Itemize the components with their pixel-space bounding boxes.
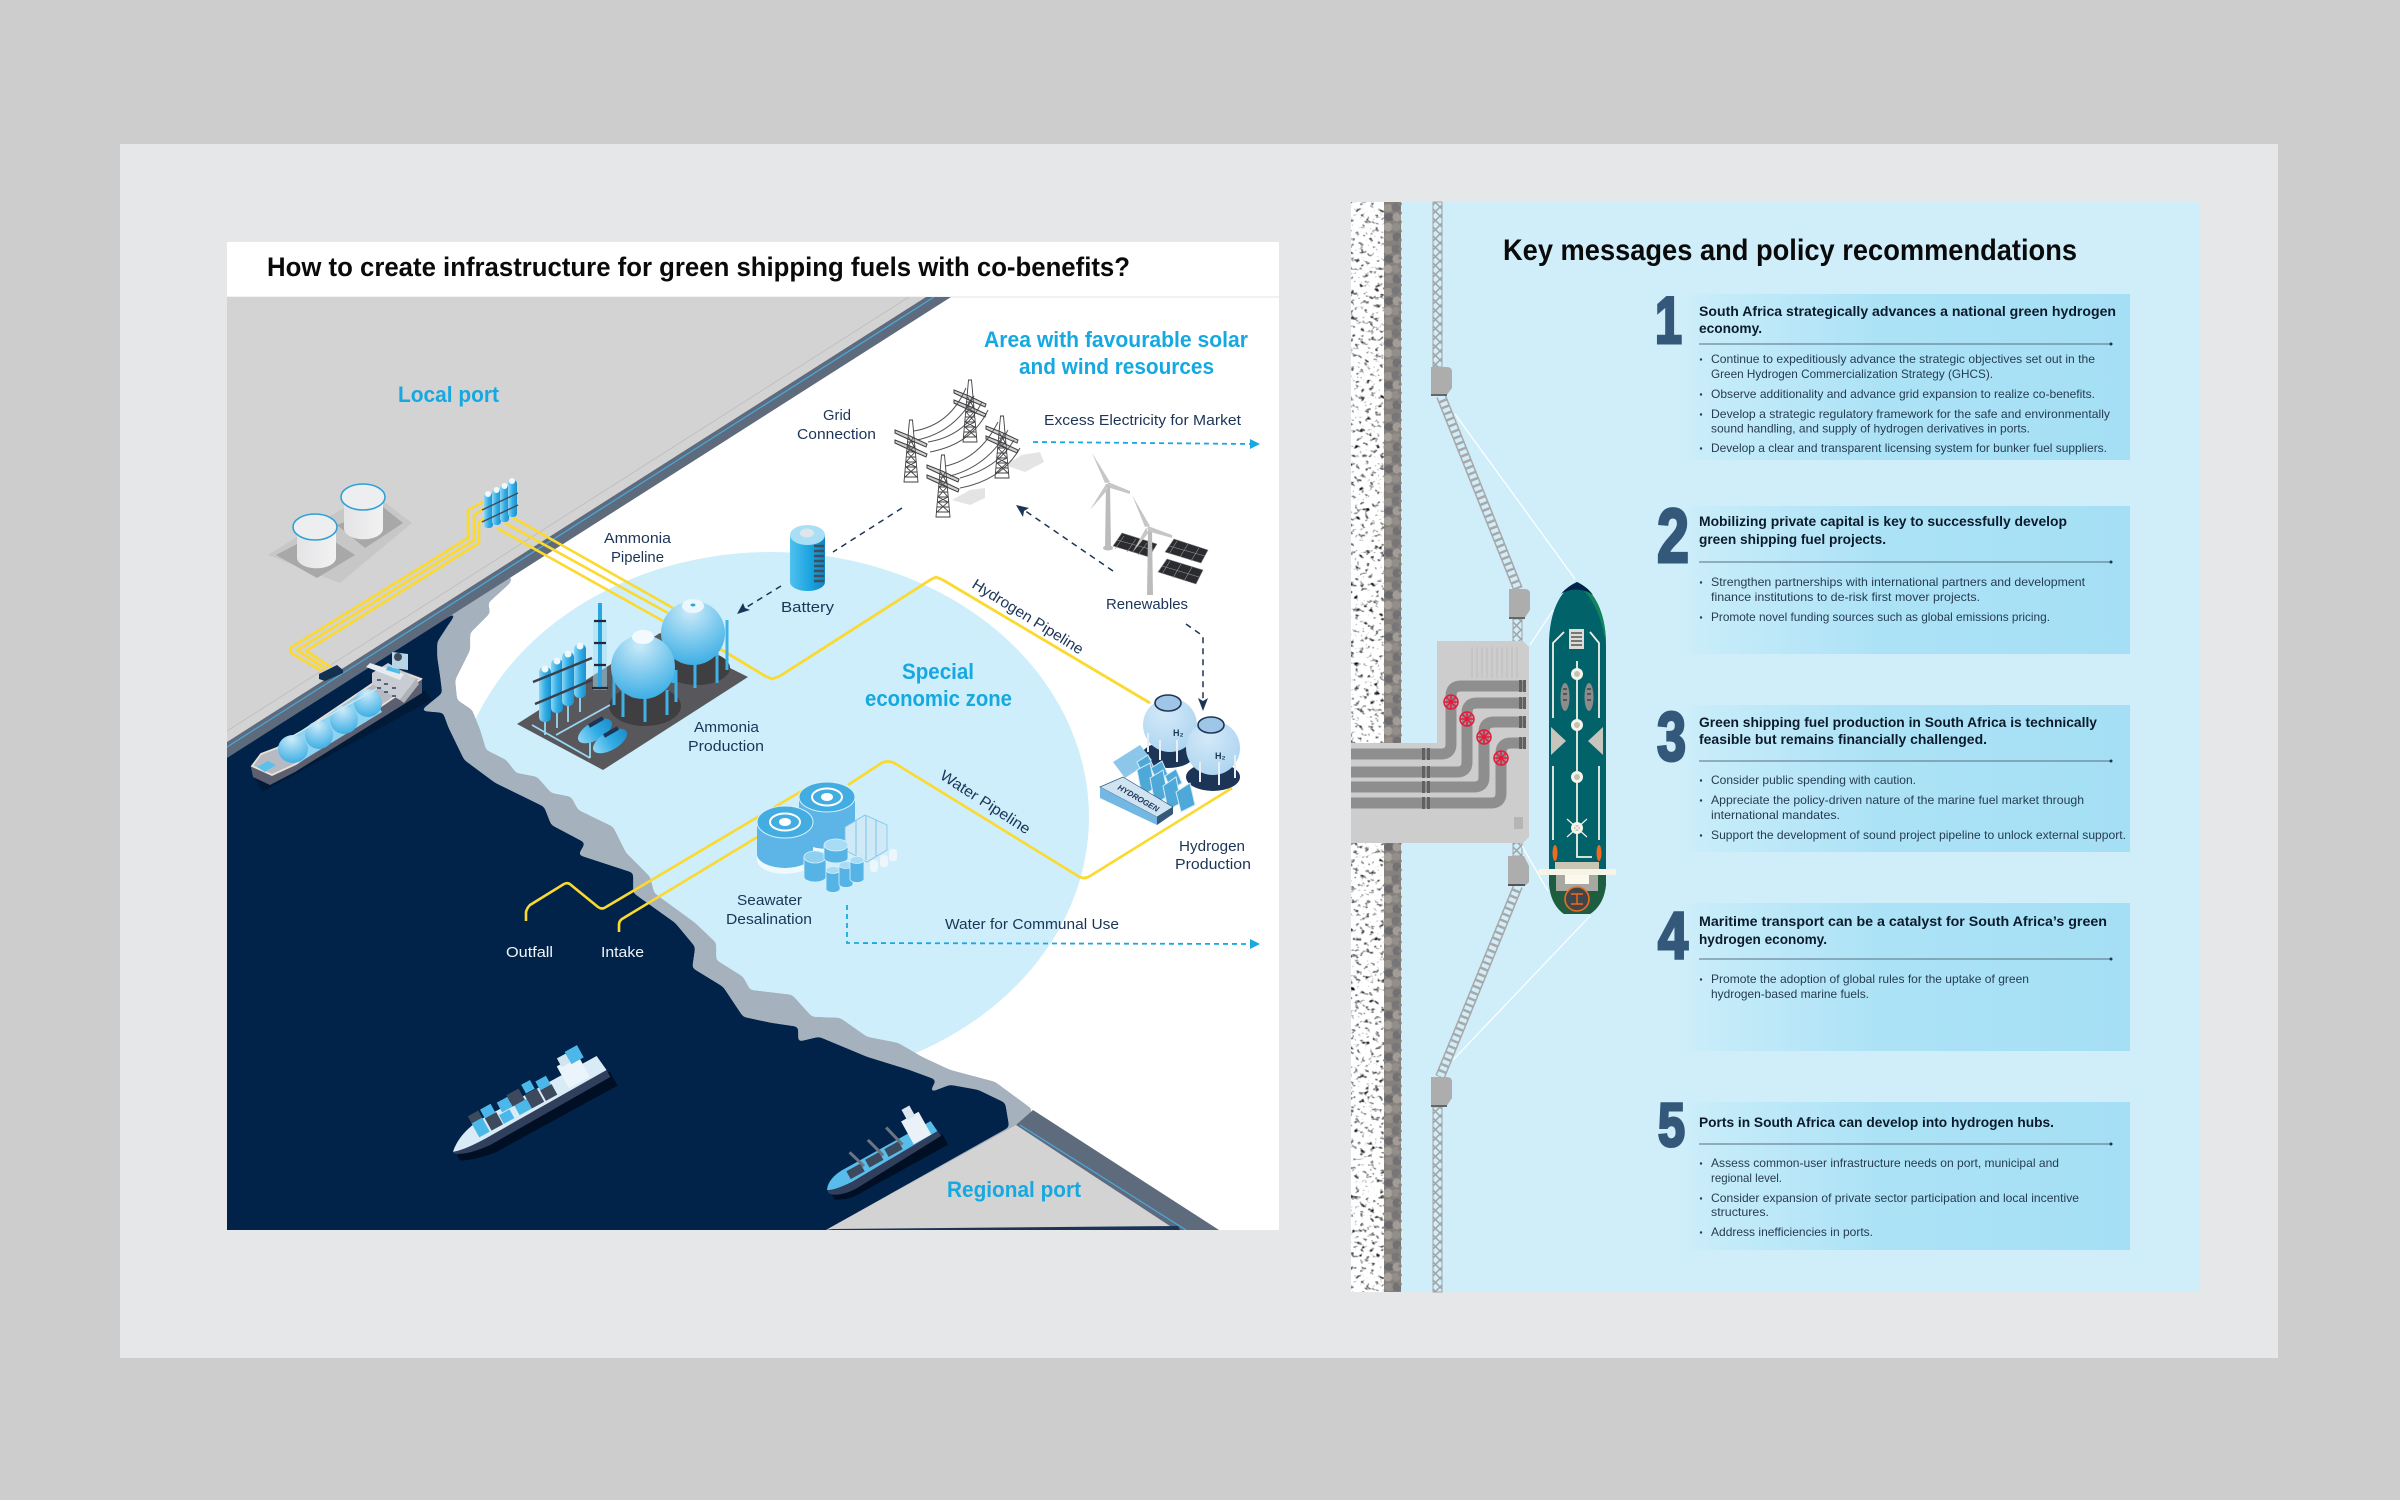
card 5: Address inefficiencies in ports. [1711, 1225, 1873, 1239]
pipelines: yellow local port to jetty [290, 501, 485, 671]
map labels: Battery [781, 599, 835, 616]
infographic canvas [120, 144, 2278, 1358]
number 2: 2 [1657, 494, 1689, 579]
map labels: Grid [823, 407, 851, 424]
blue dashed arrow: excess electricity [1033, 439, 1260, 449]
inner sheet [120, 144, 2278, 1358]
card 3: Consider public spending with caution. [1711, 773, 1916, 787]
map labels: Excess Electricity for Market [1044, 412, 1242, 429]
card 3 [1657, 698, 2130, 852]
card 1: South Africa strategically advances a national green hydrogen [1699, 303, 2116, 319]
card 5: Ports in South Africa can develop into hydrogen hubs. [1699, 1114, 2054, 1130]
card 3: international mandates. [1711, 808, 1840, 822]
valves [1444, 695, 1508, 765]
card 4: hydrogen-based marine fuels. [1711, 987, 1869, 1001]
local port land [227, 297, 951, 758]
number 5: 5 [1658, 1091, 1685, 1159]
card 1: Continue to expeditiously advance the strategic objectives set out in the [1711, 352, 2095, 366]
heading: key messages: Key messages and policy recommendations [1503, 234, 2077, 267]
card 2: Promote novel funding sources such as global emissions pricing. [1711, 610, 2050, 624]
map labels: Water Pipeline [937, 767, 1033, 838]
card 1: Develop a strategic regulatory framework for the safe and environmentally [1711, 407, 2110, 421]
map labels: Hydrogen [1179, 838, 1245, 855]
card 2: Mobilizing private capital is key to successfully develop [1699, 513, 2067, 529]
card 1: sound handling, and supply of hydrogen derivatives in ports. [1711, 422, 2030, 436]
arrowheads [737, 505, 1208, 711]
icon: bulk carrier [811, 1098, 948, 1207]
icon: grid pylons [895, 380, 1044, 517]
icon: battery [790, 525, 825, 591]
card 3: feasible but remains financially challenged. [1699, 731, 1987, 747]
map labels: Water for Communal Use [945, 916, 1119, 933]
dashed arrows: energy flows [742, 508, 1203, 700]
jetty platform with pipes [1351, 641, 1529, 843]
jetty trestle south [1431, 843, 1529, 1292]
pipeline: water network [526, 762, 1232, 932]
card 2: green shipping fuel projects. [1699, 531, 1886, 547]
card 5 [1658, 1091, 2130, 1250]
jetty trestle north [1431, 202, 1530, 642]
card 1: Observe additionality and advance grid expansion to realize co-benefits. [1711, 387, 2095, 401]
card 4 [1658, 898, 2130, 1051]
map labels: Area with favourable solar [984, 327, 1248, 352]
card 3: Appreciate the policy-driven nature of the marine fuel market through [1711, 793, 2084, 807]
map labels: economic zone [865, 686, 1012, 711]
map labels: Intake [601, 944, 644, 961]
card 1: economy. [1699, 320, 1762, 336]
card 2 [1657, 494, 2130, 654]
card 1: Green Hydrogen Commercialization Strategy (GHCS). [1711, 367, 1993, 381]
panel: infrastructure map [200, 242, 1279, 1250]
map labels: Production [688, 738, 764, 755]
icon: ammonia columns, local port [482, 478, 518, 528]
icon: ammonia production plant [517, 599, 748, 770]
panel: key messages [1351, 202, 2200, 1292]
map labels: Seawater [737, 892, 802, 909]
card 1: Develop a clear and transparent licensing system for bunker fuel suppliers. [1711, 441, 2107, 455]
map labels: Production [1175, 856, 1251, 873]
map labels: Local port [398, 382, 500, 407]
ammonia tower [592, 603, 608, 690]
icon: tanker top view [1538, 582, 1616, 914]
card 4: hydrogen economy. [1699, 931, 1827, 947]
mooring lines [1453, 414, 1590, 1060]
icon: hydrogen production: H₂ [1215, 751, 1226, 761]
card 5: Assess common-user infrastructure needs on port, municipal and [1711, 1156, 2059, 1170]
icon: hydrogen production: HYDROGEN [1116, 783, 1161, 814]
blue dashed arrow: water for communal use [847, 905, 1260, 949]
icon: hydrogen production [1100, 695, 1240, 825]
number 3: 3 [1657, 698, 1686, 775]
card 5: regional level. [1711, 1171, 1782, 1185]
map labels: Renewables [1106, 596, 1188, 613]
map labels: Special [902, 659, 974, 684]
icon: seawater desalination [757, 782, 897, 893]
shoreline texture [1351, 202, 1401, 1292]
map labels: Outfall [506, 944, 553, 961]
map labels: Hydrogen Pipeline [969, 576, 1086, 658]
card 3: Green shipping fuel production in South Africa is technically [1699, 714, 2097, 730]
map labels [398, 327, 1251, 1202]
icon: hydrogen production: H₂ [1173, 728, 1184, 738]
card 1 [1655, 283, 2130, 460]
number 4: 4 [1658, 898, 1688, 972]
special economic zone area [453, 552, 1089, 1082]
card 3: Support the development of sound project pipeline to unlock external support. [1711, 828, 2126, 842]
icon: container ship [437, 1037, 617, 1170]
card 2: Strengthen partnerships with international partners and development [1711, 575, 2086, 589]
map labels: Connection [797, 426, 876, 443]
map labels: Ammonia [604, 530, 672, 547]
pipeline: hydrogen [717, 577, 1150, 703]
map labels: Regional port [947, 1177, 1082, 1202]
card 2: finance institutions to de-risk first mover projects. [1711, 590, 1980, 604]
icon: storage tanks, local port [268, 484, 412, 583]
icon: jetty connector [319, 665, 343, 681]
card 5: structures. [1711, 1205, 1769, 1219]
map labels: Pipeline [611, 549, 664, 566]
card 4: Promote the adoption of global rules for the uptake of green [1711, 972, 2029, 986]
map labels: and wind resources [1019, 354, 1214, 379]
sea [200, 611, 1009, 1250]
regional port land [826, 1110, 1219, 1230]
number 1: 1 [1655, 283, 1682, 357]
map artwork [200, 297, 1219, 1250]
map labels: Desalination [726, 911, 812, 928]
icon: renewables [1090, 453, 1208, 595]
pipelines: ammonia [497, 517, 673, 621]
card 5: Consider expansion of private sector participation and local incentive [1711, 1191, 2079, 1205]
card 4: Maritime transport can be a catalyst for South Africa’s green [1699, 913, 2107, 929]
icon: LNG tanker [251, 652, 432, 792]
coast rocks [342, 578, 1032, 1230]
title: How to create infrastructure for green shipping fuels with co-benefits? [267, 252, 1130, 282]
map labels: Ammonia [694, 719, 760, 736]
